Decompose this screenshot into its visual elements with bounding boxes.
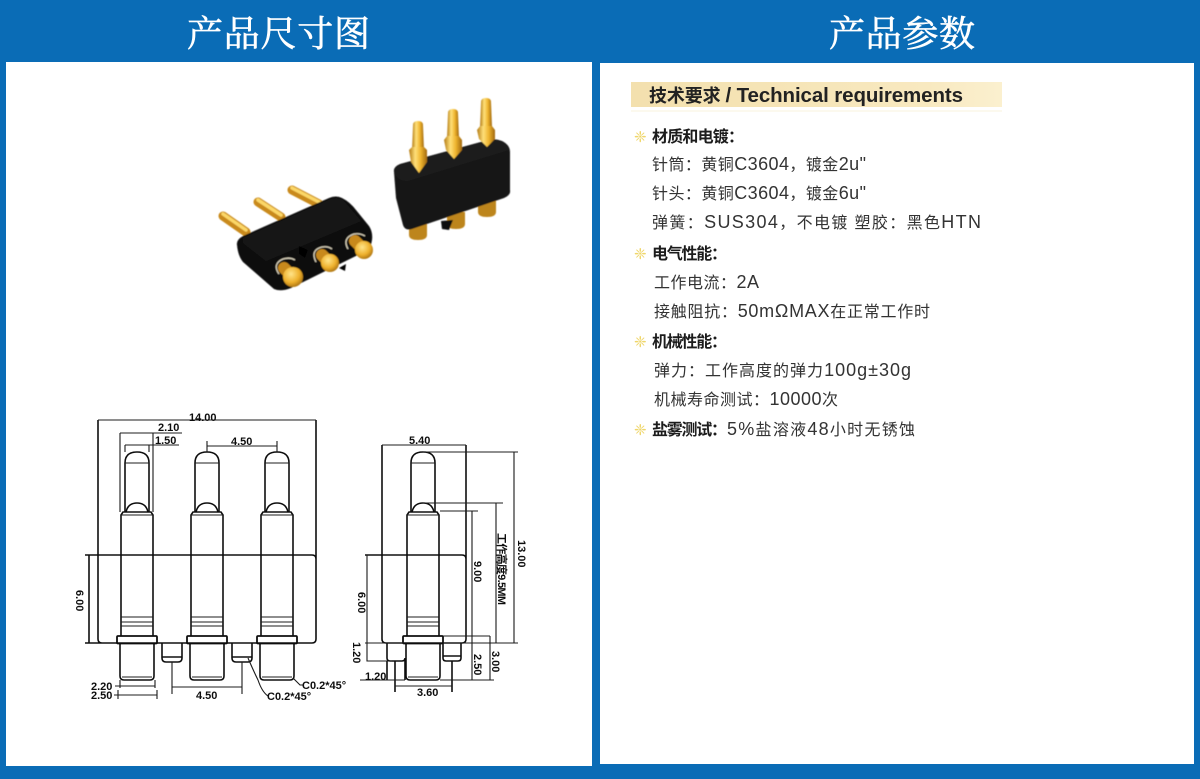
dimension: side 1.20 vertical: 1.20 [350, 642, 362, 663]
component: three pins front view [117, 452, 297, 680]
photo: right connector standing [394, 98, 510, 240]
text block: mechanical performance [634, 332, 911, 409]
dimension: 4.50 bottom [172, 662, 242, 702]
dimension: 2.50 side [440, 654, 483, 680]
callout: chamfer left: C0.2*45° [267, 691, 311, 703]
dimension: 3.00 side [440, 636, 501, 680]
text block: materials and plating [634, 127, 981, 232]
text block: materials and plating: 材质和电镀： [652, 127, 744, 146]
dimension: 2.50 [91, 690, 157, 702]
dimension: 6.00: 6.00 [73, 590, 85, 611]
panel: left product dimensions [6, 62, 592, 766]
dimension: 13.00: 13.00 [515, 540, 527, 568]
dimension: 2.10 [120, 422, 182, 512]
dimension: 4.50 bottom: 4.50 [196, 690, 217, 702]
callout: chamfer right: C0.2*45° [302, 680, 346, 692]
text block: materials and plating: 针筒：黄铜C3604，镀金2u" [652, 154, 866, 174]
component: bottom nubs [162, 643, 252, 662]
callout: chamfer left [248, 658, 311, 703]
drawing: front view technical drawing [73, 412, 346, 703]
component: housing outline [85, 420, 316, 643]
dimension: side 1.20 vertical [350, 642, 392, 663]
panel: right product parameters [600, 63, 1194, 764]
text block: electrical performance: 接触阻抗：50mΩMAX在正常工作时 [654, 301, 930, 321]
text block: mechanical performance: 机械性能： [652, 332, 727, 351]
icon: yellow bullet: ❈ [634, 245, 647, 263]
dimension: side 6.00 [355, 555, 404, 643]
dimension: 1.50: 1.50 [155, 435, 176, 447]
component: side pin [403, 452, 443, 680]
title: product dimensions: 产品尺寸图 [187, 6, 370, 57]
dimension: 3.60 [395, 686, 452, 699]
dimension: side 1.20 horizontal [360, 671, 405, 683]
dimension: 2.10: 2.10 [158, 422, 179, 434]
dimension: 3.60: 3.60 [417, 687, 438, 699]
text block: electrical performance: 工作电流：2A [654, 272, 759, 292]
dimension: 9.00 [440, 511, 483, 680]
heading bar: technical requirements [631, 82, 1002, 112]
dimension: 6.00 [73, 555, 89, 643]
dimension: working height 9.5MM [423, 503, 509, 643]
dimension: 4.50 top: 4.50 [231, 436, 252, 448]
dimension: 2.20: 2.20 [91, 681, 112, 693]
text block: salt spray test: 5%盐溶液48小时无锈蚀 [727, 419, 915, 439]
text block: salt spray test: 盐雾测试： [652, 421, 727, 439]
dimension: 14.00: 14.00 [189, 412, 217, 424]
dimension: 4.50 top [207, 436, 277, 452]
photo: left connector lying down [223, 188, 373, 290]
text block: salt spray test [634, 419, 915, 439]
text block: mechanical performance: 机械寿命测试：10000次 [654, 389, 838, 409]
text block: electrical performance: 电气性能： [652, 244, 727, 263]
dimension: 13.00 [423, 452, 527, 643]
dimension: 1.50 [125, 435, 179, 452]
icon: yellow bullet: ❈ [634, 333, 647, 351]
icon: yellow bullet: ❈ [634, 128, 647, 146]
text block: materials and plating: 针头：黄铜C3604，镀金6u" [652, 183, 866, 203]
dimension: 5.40: 5.40 [409, 435, 430, 447]
text block: mechanical performance: 弹力：工作高度的弹力100g±30g [654, 360, 911, 380]
dimension: 2.20 [91, 680, 155, 693]
drawing: side view technical drawing [350, 435, 527, 699]
component: side nubs [387, 643, 461, 692]
heading bar: technical requirements: 技术要求 / Technical requirements [649, 84, 963, 107]
dimension: 9.00: 9.00 [471, 561, 483, 582]
dimension: 5.40 [382, 435, 466, 447]
text block: materials and plating: 弹簧：SUS304，不电镀 塑胶：黑色HTN [652, 212, 981, 232]
component: side housing [365, 445, 466, 643]
dimension: 2.50: 2.50 [91, 690, 112, 702]
dimension: 3.00 side: 3.00 [489, 651, 501, 672]
dimension: 2.50 side: 2.50 [471, 654, 483, 675]
title: product parameters: 产品参数 [829, 6, 975, 57]
dimension: working height 9.5MM: 工作高度9.5MM [495, 533, 509, 605]
icon: yellow bullet: ❈ [634, 421, 647, 439]
dimension: side 6.00: 6.00 [355, 592, 367, 613]
dimension: side 1.20 horizontal: 1.20 [365, 671, 386, 683]
photo: connector pair [223, 98, 510, 290]
text block: electrical performance [634, 244, 930, 321]
